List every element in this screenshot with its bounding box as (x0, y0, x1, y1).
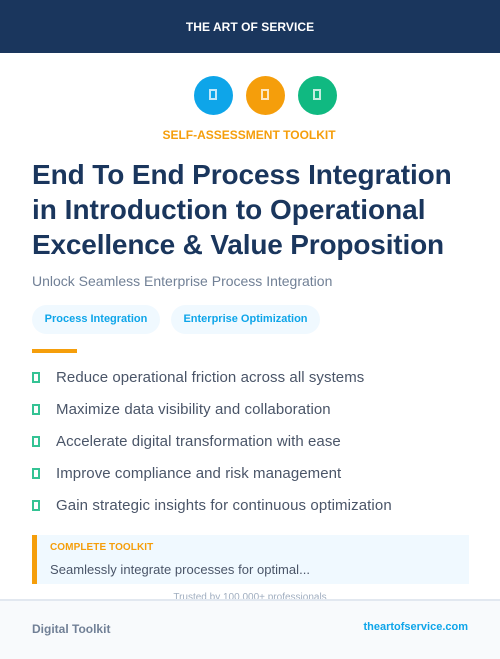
footer (0, 599, 500, 659)
icon: orange circle (246, 76, 285, 115)
title (32, 159, 452, 260)
callout: Seamlessly integrate processes for optimal... (50, 562, 310, 577)
title: Excellence & Value Proposition (32, 229, 444, 260)
eyebrow label: SELF-ASSESSMENT TOOLKIT (162, 128, 336, 142)
header band: THE ART OF SERVICE (186, 20, 314, 34)
footer: theartofservice.com (363, 621, 468, 633)
accent bar (32, 349, 77, 353)
trust line: Trusted by 100,000+ professionals (173, 592, 327, 603)
tag: enterprise optimization (171, 305, 320, 334)
title: End To End Process Integration (32, 159, 452, 190)
icon: green circle (298, 76, 337, 115)
tag: process integration: Process Integration (45, 313, 147, 325)
icon: blue circle (194, 76, 233, 115)
benefits list: Reduce operational friction across all systems (56, 369, 364, 386)
benefits list (32, 369, 392, 514)
benefits list: Gain strategic insights for continuous optimization (56, 497, 392, 514)
benefits list: Accelerate digital transformation with ease (56, 433, 341, 450)
benefits list: Improve compliance and risk management (56, 465, 341, 482)
callout: COMPLETE TOOLKIT (50, 542, 153, 553)
benefits list: Maximize data visibility and collaboration (56, 401, 331, 418)
title: in Introduction to Operational (32, 194, 426, 225)
header band (0, 0, 500, 53)
footer: Digital Toolkit (32, 622, 110, 636)
callout (32, 535, 469, 584)
tag: process integration (32, 305, 160, 334)
subtitle: Unlock Seamless Enterprise Process Integration (32, 273, 332, 289)
tag: enterprise optimization: Enterprise Optimization (183, 313, 308, 325)
